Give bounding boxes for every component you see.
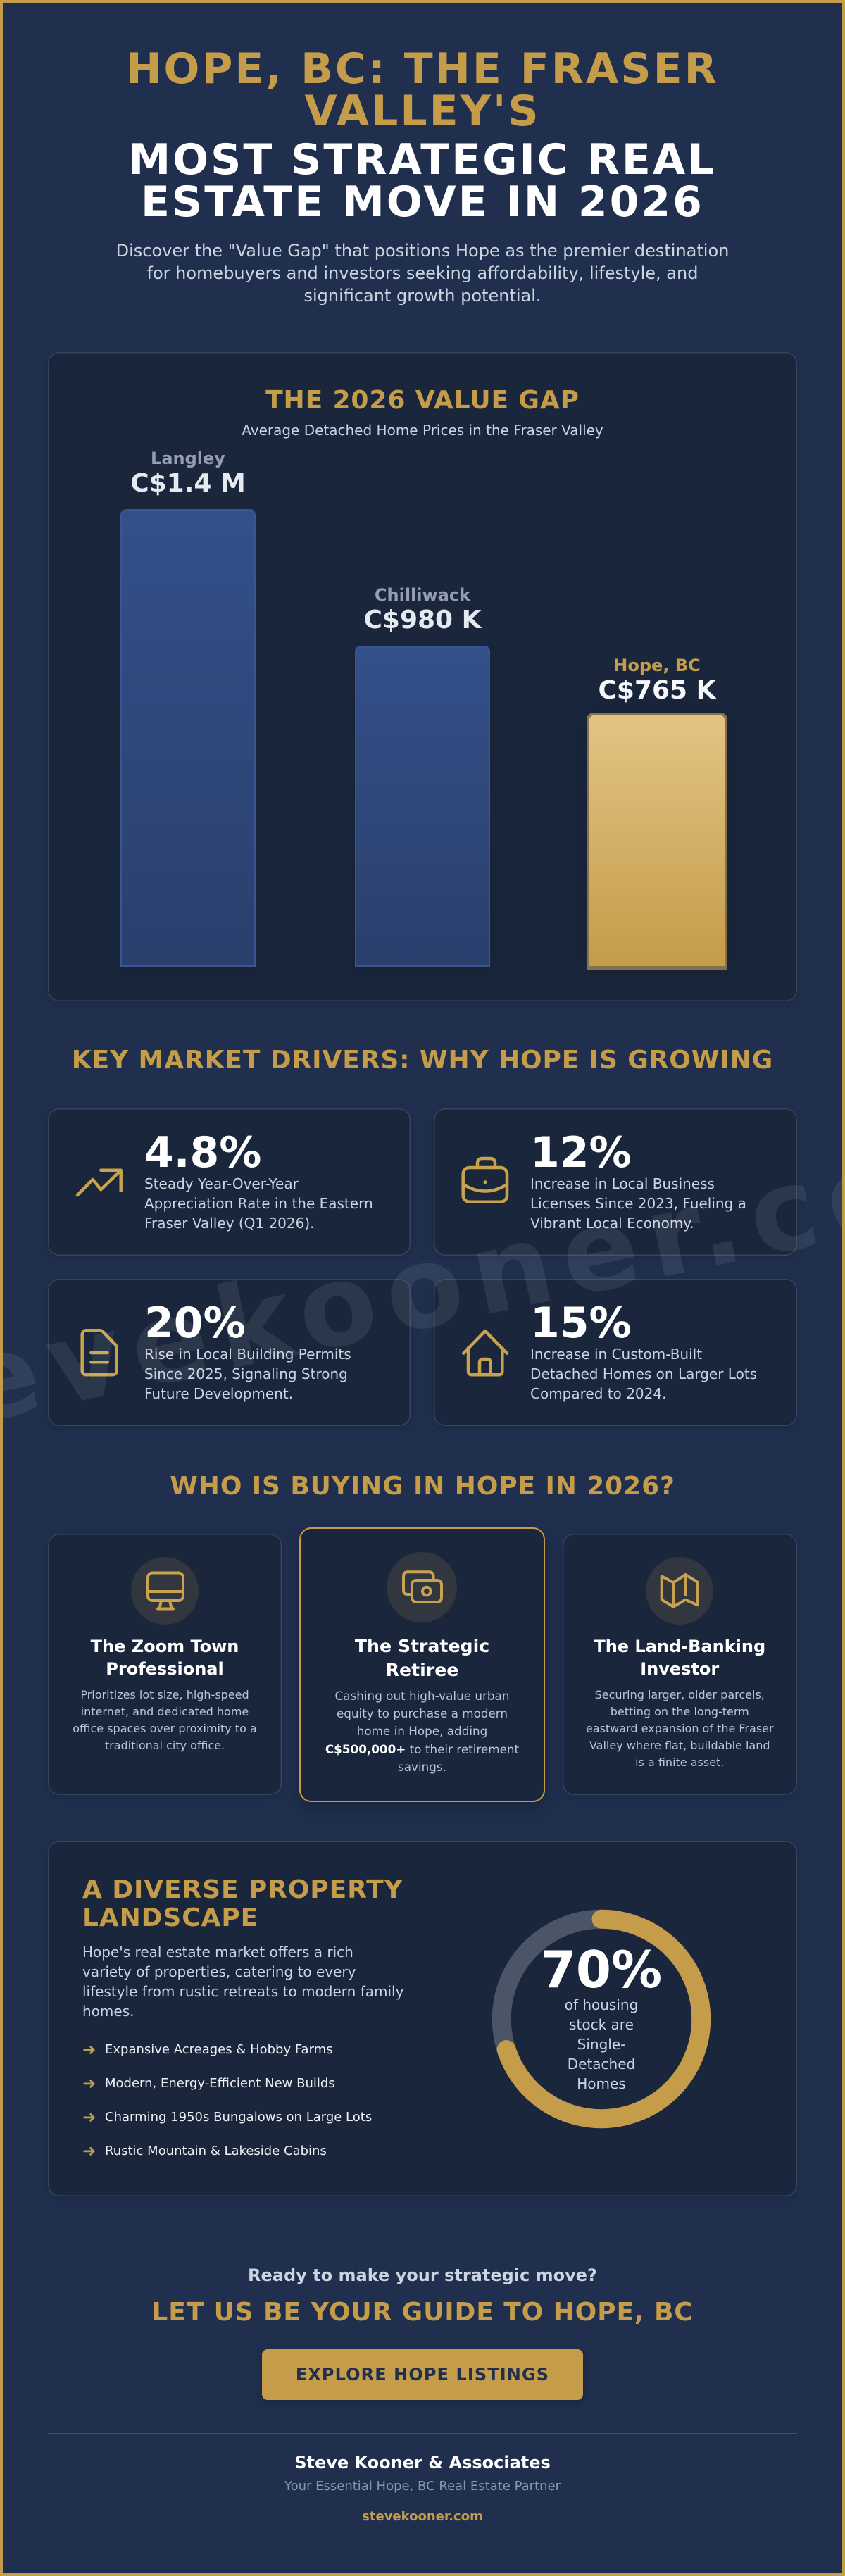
icon: monitor: [146, 1572, 184, 1610]
property type list: [82, 2041, 372, 2161]
stat description: Since 2025, Signaling Strong: [144, 1365, 348, 1382]
persona title: Professional: [106, 1659, 224, 1679]
persona description: Prioritizes lot size, high-speed: [80, 1687, 249, 1701]
bar shape: Chilliwack: [355, 646, 490, 967]
persona description: betting on the long-term: [611, 1704, 749, 1718]
bar shape: Langley: [120, 509, 256, 967]
persona description: savings.: [398, 1760, 446, 1774]
bar: Hope, BC: [587, 656, 727, 970]
panel: diverse property landscape: [48, 1841, 797, 2196]
donut caption: stock are: [569, 2016, 634, 2033]
donut chart: 70%: [492, 1910, 711, 2128]
icon background circle: [646, 1557, 713, 1625]
icon: briefcase: [461, 1156, 508, 1203]
persona title: Retiree: [386, 1660, 458, 1680]
title: gold line: [126, 44, 719, 136]
bar shape: Hope: [587, 713, 727, 970]
stat description: Appreciation Rate in the Eastern: [144, 1195, 373, 1212]
stat description: Increase in Custom-Built: [530, 1346, 702, 1363]
persona title: The Strategic: [355, 1636, 489, 1656]
value: Chilliwack price: C$980 K: [363, 606, 482, 634]
footer: company name: Steve Kooner & Associates: [294, 2453, 551, 2472]
persona description: [586, 1687, 774, 1769]
panel: value gap chart: [48, 352, 797, 1001]
paragraph: Hope's real estate market offers a rich: [82, 1944, 353, 1961]
stat description: [530, 1346, 757, 1402]
card: strategic retiree (highlighted): [299, 1527, 545, 1802]
heading: who is buying: WHO IS BUYING IN HOPE IN 2026?: [170, 1472, 675, 1500]
donut caption: Single-: [577, 2036, 625, 2053]
stat: 15%: 15%: [530, 1299, 632, 1348]
paragraph: homes.: [82, 2003, 134, 2020]
heading: key market drivers: KEY MARKET DRIVERS: WHY HOPE IS GROWING: [72, 1046, 773, 1075]
persona description: [73, 1687, 257, 1752]
stat description: [144, 1175, 373, 1232]
intro text: [116, 241, 729, 306]
list item: Modern, Energy-Efficient New Builds: [105, 2076, 335, 2090]
footer: tagline: Your Essential Hope, BC Real Estate Partner: [284, 2479, 561, 2493]
paragraph: variety of properties, catering to every: [82, 1963, 356, 1980]
persona description: internet, and dedicated home: [81, 1704, 249, 1718]
persona description: office spaces over proximity to a: [73, 1721, 257, 1735]
intro text: significant growth potential.: [303, 286, 542, 306]
intro text: Discover the "Value Gap" that positions Hope as the premier destination: [116, 241, 729, 261]
bar: Langley: [120, 449, 256, 967]
list item: Rustic Mountain & Lakeside Cabins: [105, 2144, 327, 2158]
card: 4.8% appreciation: [48, 1108, 411, 1256]
icon: document: [80, 1329, 118, 1376]
stat: 20%: 20%: [144, 1299, 246, 1348]
stat description: Detached Homes on Larger Lots: [530, 1365, 757, 1382]
label: Hope: Hope, BC: [613, 656, 701, 675]
persona title: [355, 1636, 489, 1680]
persona title: [90, 1637, 239, 1679]
icon background circle: [386, 1552, 457, 1622]
persona description: C$500,000+ to their retirement: [325, 1742, 519, 1756]
label: Langley: Langley: [151, 449, 225, 468]
persona description: is a finite asset.: [635, 1755, 724, 1769]
button: explore listings: EXPLORE HOPE LISTINGS: [296, 2365, 549, 2384]
persona description: Securing larger, older parcels,: [595, 1687, 765, 1701]
card: 12% business licenses: [434, 1108, 797, 1256]
persona title: The Zoom Town: [91, 1637, 239, 1656]
persona title: Investor: [640, 1659, 719, 1679]
donut value: 70%: [541, 1940, 662, 1999]
persona description: eastward expansion of the Fraser: [586, 1721, 774, 1735]
button: explore listings: [262, 2349, 583, 2400]
stat description: Licenses Since 2023, Fueling a: [530, 1195, 746, 1212]
title: gold line: HOPE, BC: THE FRASER: [126, 44, 719, 94]
persona description: equity to purchase a modern: [337, 1706, 508, 1720]
icon: map: [661, 1573, 699, 1608]
donut caption: Detached: [568, 2056, 635, 2072]
card: land-banking investor: [563, 1534, 797, 1795]
title: white line: ESTATE MOVE IN 2026: [141, 177, 704, 227]
list item: Charming 1950s Bungalows on Large Lots: [105, 2110, 372, 2124]
stat description: Fraser Valley (Q1 2026).: [144, 1215, 315, 1232]
donut caption: Homes: [577, 2075, 626, 2092]
paragraph: lifestyle from rustic retreats to modern family: [82, 1983, 403, 2000]
heading: property landscape: LANDSCAPE: [82, 1903, 258, 1932]
donut caption: [565, 1996, 638, 2092]
persona description: traditional city office.: [105, 1738, 225, 1752]
title: white line: MOST STRATEGIC REAL: [128, 135, 717, 185]
persona description: [325, 1689, 519, 1774]
label: Chilliwack: Chilliwack: [375, 585, 470, 605]
heading: value gap: THE 2026 VALUE GAP: [265, 386, 580, 414]
stat description: Compared to 2024.: [530, 1385, 666, 1402]
footer: website: stevekooner.com: [362, 2509, 483, 2524]
icon background circle: [131, 1557, 199, 1625]
list item: ➜: [82, 2075, 96, 2093]
stat description: Vibrant Local Economy.: [530, 1215, 694, 1232]
persona description: Valley where flat, buildable land: [589, 1738, 770, 1752]
donut ring: [492, 1910, 711, 2128]
chart subtitle: Average Detached Home Prices in the Fraser Valley: [242, 422, 603, 439]
persona title: The Land-Banking: [594, 1637, 765, 1656]
intro text: for homebuyers and investors seeking affordability, lifestyle, and: [147, 263, 698, 283]
list item: ➜: [82, 2142, 96, 2161]
call to action heading: LET US BE YOUR GUIDE TO HOPE, BC: [151, 2298, 694, 2327]
card: zoom town professional: [48, 1534, 282, 1795]
list item: ➜: [82, 2108, 96, 2127]
paragraph: [82, 1944, 403, 2020]
stat: 12%: 12%: [530, 1128, 632, 1177]
heading: property landscape: [82, 1875, 403, 1932]
list item: Expansive Acreages & Hobby Farms: [105, 2042, 333, 2056]
persona description: Cashing out high-value urban: [335, 1689, 509, 1703]
stat description: [530, 1175, 746, 1232]
icon: trending arrow: [76, 1169, 123, 1197]
persona description: home in Hope, adding: [357, 1724, 487, 1738]
stat description: Steady Year-Over-Year: [144, 1175, 299, 1192]
stat description: Increase in Local Business: [530, 1175, 715, 1192]
stat: 4.8%: 4.8%: [144, 1128, 261, 1177]
list item: ➜: [82, 2041, 96, 2059]
value: Langley price: C$1.4 M: [130, 469, 246, 497]
card: 15% custom homes: [434, 1279, 797, 1426]
heading: property landscape: A DIVERSE PROPERTY: [82, 1875, 403, 1904]
stat description: Future Development.: [144, 1385, 293, 1402]
stat description: [144, 1346, 351, 1402]
bar: Chilliwack: [355, 585, 490, 967]
card: 20% building permits: [48, 1279, 411, 1426]
call to action lead-in: Ready to make your strategic move?: [248, 2265, 597, 2285]
title: gold line: VALLEY'S: [304, 87, 541, 136]
value: Hope price: C$765 K: [598, 676, 716, 704]
donut caption: of housing: [565, 1996, 638, 2013]
persona title: [594, 1637, 765, 1679]
stat description: Rise in Local Building Permits: [144, 1346, 351, 1363]
icon: house: [462, 1330, 508, 1376]
icon: banknotes: [402, 1570, 443, 1603]
title: white line: [128, 135, 717, 227]
title: [126, 44, 719, 227]
